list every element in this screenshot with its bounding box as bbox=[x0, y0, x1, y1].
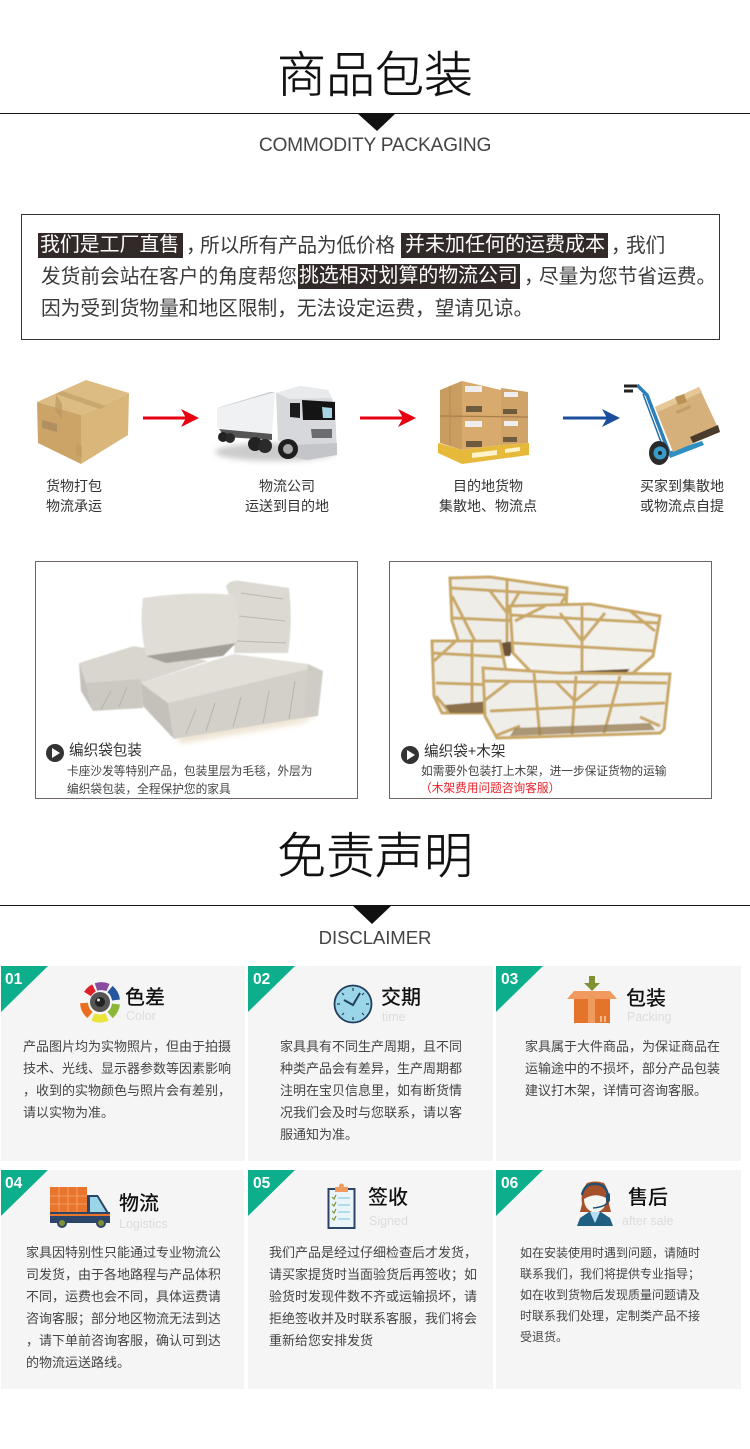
sub-label time: time bbox=[382, 1010, 406, 1024]
icon: play bullet bbox=[401, 746, 419, 764]
text: crate note in red: （木架费用问题咨询客服） bbox=[420, 782, 560, 795]
heading 交期: 交期 bbox=[381, 987, 421, 1009]
text: crate description: 如需要外包装打上木架，进一步保证货物的运输 bbox=[421, 765, 666, 778]
label: step 4: 或物流点自提 bbox=[640, 498, 724, 514]
badge 04 bbox=[1, 1170, 48, 1216]
body text: 况我们会及时与您联系，请以客 bbox=[280, 1105, 462, 1120]
body text: 种类产品会有差异，生产周期都 bbox=[280, 1061, 462, 1076]
badge 06 bbox=[496, 1170, 543, 1216]
label: step 1: 货物打包 bbox=[46, 478, 102, 494]
heading 售后: 售后 bbox=[628, 1187, 668, 1209]
photo: wooden crates bbox=[430, 574, 672, 740]
label: step 4: 买家到集散地 bbox=[640, 478, 724, 494]
icon: white truck bbox=[214, 386, 337, 464]
divider with pointer bbox=[0, 113, 750, 131]
sub-label after sale: after sale bbox=[622, 1214, 673, 1228]
title: commodity packaging: 商品包装 bbox=[277, 49, 473, 103]
text: comma after highlight: ， bbox=[186, 235, 206, 257]
label: step 3: 集散地、物流点 bbox=[439, 498, 537, 514]
highlight: choose cost-effective logistics: 挑选相对划算的物流公司 bbox=[299, 265, 518, 287]
title: disclaimer: 免责声明 bbox=[277, 830, 473, 884]
photo: sofa wrapped in woven bag bbox=[78, 580, 324, 745]
body text: 运输途中的不损坏，部分产品包装 bbox=[525, 1061, 720, 1076]
badge 05 bbox=[248, 1170, 295, 1216]
body text bbox=[23, 1039, 231, 1120]
body text: 家具具有不同生产周期，且不同 bbox=[280, 1039, 462, 1054]
icon: hand truck with box bbox=[624, 384, 720, 465]
body text: 家具属于大件商品，为保证商品在 bbox=[525, 1039, 720, 1054]
text: notice line 1 start: 所以所有产品为低价格 bbox=[200, 235, 395, 257]
icon: boxes on pallet bbox=[438, 381, 529, 464]
text: notice line 2 end: 尽量为您节省运费。 bbox=[539, 266, 716, 288]
text: woven bag description: 编织袋包装，全程保护您的家具 bbox=[67, 783, 231, 796]
heading 包装: 包装 bbox=[626, 988, 666, 1010]
label: step 2 bbox=[245, 478, 329, 514]
label: step 1: 物流承运 bbox=[46, 498, 102, 514]
sub-label Color: Color bbox=[126, 1009, 156, 1023]
subtitle: disclaimer: DISCLAIMER bbox=[319, 927, 431, 948]
body text: 如在安装使用时遇到问题，请随时 bbox=[520, 1246, 700, 1260]
label: step 2: 运送到目的地 bbox=[245, 498, 329, 514]
card 03: packing bbox=[496, 966, 741, 1161]
badge 02 bbox=[248, 966, 295, 1012]
body text: 受退货。 bbox=[520, 1330, 568, 1344]
body text: 的物流运送路线。 bbox=[26, 1355, 130, 1370]
body text bbox=[280, 1039, 462, 1142]
arrow: red 2 bbox=[360, 409, 416, 427]
body text: 注明在宝贝信息里，如有断货情 bbox=[280, 1083, 462, 1098]
body text: ，请下单前咨询客服，确认可到达 bbox=[26, 1333, 220, 1348]
badge 03 bbox=[496, 966, 543, 1012]
text: notice line 3: 因为受到货物量和地区限制，无法设定运费，望请见谅。 bbox=[41, 298, 533, 320]
body text: 建议打木架，详情可咨询客服。 bbox=[525, 1083, 707, 1098]
body text: ，收到的实物颜色与照片会有差别， bbox=[23, 1083, 231, 1098]
body text: 不同，运费也会不同，具体运费请 bbox=[26, 1289, 220, 1304]
icon: play bullet bbox=[46, 744, 64, 762]
icon: delivery truck bbox=[50, 1187, 110, 1228]
text: comma after third highlight: ， bbox=[524, 266, 544, 288]
heading 色差: 色差 bbox=[125, 987, 165, 1009]
body text: 拒绝签收并及时联系客服，我们将会 bbox=[269, 1311, 477, 1326]
icon: cardboard box bbox=[37, 380, 129, 464]
badge number 02: 02 bbox=[253, 971, 270, 988]
card 01: color bbox=[1, 966, 245, 1161]
icon: camera lens bbox=[80, 982, 120, 1023]
body text: 技术、光线、显示器参数等因素影响 bbox=[23, 1061, 231, 1076]
body text: 家具因特别性只能通过专业物流公 bbox=[26, 1245, 220, 1260]
body text: 服通知为准。 bbox=[280, 1127, 358, 1142]
subtitle: commodity packaging: COMMODITY PACKAGING bbox=[259, 135, 491, 156]
body text: 请以实物为准。 bbox=[23, 1105, 114, 1120]
panel: woven bag plus wooden frame bbox=[389, 561, 712, 799]
body text: 验货时发现件数不齐或运输损坏，请 bbox=[269, 1289, 477, 1304]
highlight: no shipping cost added: 并未加任何的运费成本 bbox=[405, 234, 605, 256]
icon: customer service agent bbox=[577, 1182, 613, 1226]
body text: 我们产品是经过仔细检查后才发货， bbox=[269, 1245, 477, 1260]
body text: 重新给您安排发货 bbox=[269, 1333, 373, 1348]
sub-label Logistics: Logistics bbox=[119, 1217, 168, 1231]
body text: 联系我们，我们将提供专业指导； bbox=[520, 1267, 700, 1281]
body text: 咨询客服；部分地区物流无法到达 bbox=[26, 1311, 220, 1326]
text: comma after second highlight: ， bbox=[611, 235, 631, 257]
text: woven bag description bbox=[67, 764, 312, 796]
panel: woven bag packaging bbox=[35, 561, 358, 799]
body text: 请买家提货时当面验货后再签收；如 bbox=[269, 1267, 477, 1282]
divider with pointer bbox=[0, 905, 750, 924]
text: crate heading: 编织袋+木架 bbox=[424, 744, 506, 760]
icon: clock bbox=[334, 984, 372, 1024]
sub-label Signed: Signed bbox=[369, 1214, 408, 1228]
badge 01 bbox=[1, 966, 48, 1012]
text: notice line 1 end: 我们 bbox=[626, 235, 665, 257]
body text bbox=[520, 1246, 700, 1344]
body text: 司发货，由于各地路程与产品体积 bbox=[26, 1267, 220, 1282]
label: step 2: 物流公司 bbox=[259, 478, 315, 494]
badge number 06: 06 bbox=[501, 1175, 518, 1192]
heading 物流: 物流 bbox=[119, 1193, 159, 1215]
card 06: after sale bbox=[496, 1170, 741, 1389]
body text: 如在收到货物后发现质量问题请及 bbox=[520, 1288, 700, 1302]
text: woven bag description: 卡座沙发等特别产品，包装里层为毛毯，外层为 bbox=[67, 765, 312, 778]
highlight: factory direct sale: 我们是工厂直售 bbox=[40, 234, 179, 256]
body text bbox=[525, 1039, 720, 1098]
arrow: red 1 bbox=[143, 409, 199, 427]
label: step 3 bbox=[439, 478, 537, 514]
label: step 4 bbox=[640, 478, 724, 514]
body text: 产品图片均为实物照片，但由于拍摄 bbox=[23, 1039, 231, 1054]
arrow: blue bbox=[563, 409, 620, 427]
badge number 05: 05 bbox=[253, 1175, 270, 1192]
label: step 1 bbox=[46, 478, 102, 514]
body text bbox=[26, 1245, 220, 1370]
card 05: signed bbox=[248, 1170, 493, 1389]
badge number 01: 01 bbox=[5, 971, 22, 988]
text: woven bag heading: 编织袋包装 bbox=[69, 743, 142, 759]
icon: clipboard checklist bbox=[328, 1184, 356, 1229]
text: notice line 2 start: 发货前会站在客户的角度帮您 bbox=[41, 266, 297, 288]
badge number 04: 04 bbox=[5, 1175, 22, 1192]
body text bbox=[269, 1245, 477, 1348]
panel: shipping notice bbox=[21, 214, 720, 340]
heading 签收: 签收 bbox=[368, 1187, 408, 1209]
card 04: logistics bbox=[1, 1170, 244, 1389]
card 02: delivery time bbox=[248, 966, 493, 1161]
icon: orange box with arrow bbox=[567, 976, 617, 1023]
badge number 03: 03 bbox=[501, 971, 518, 988]
label: step 3: 目的地货物 bbox=[453, 478, 523, 494]
body text: 时联系我们处理，定制类产品不接 bbox=[520, 1309, 700, 1323]
sub-label Packing: Packing bbox=[627, 1010, 671, 1024]
